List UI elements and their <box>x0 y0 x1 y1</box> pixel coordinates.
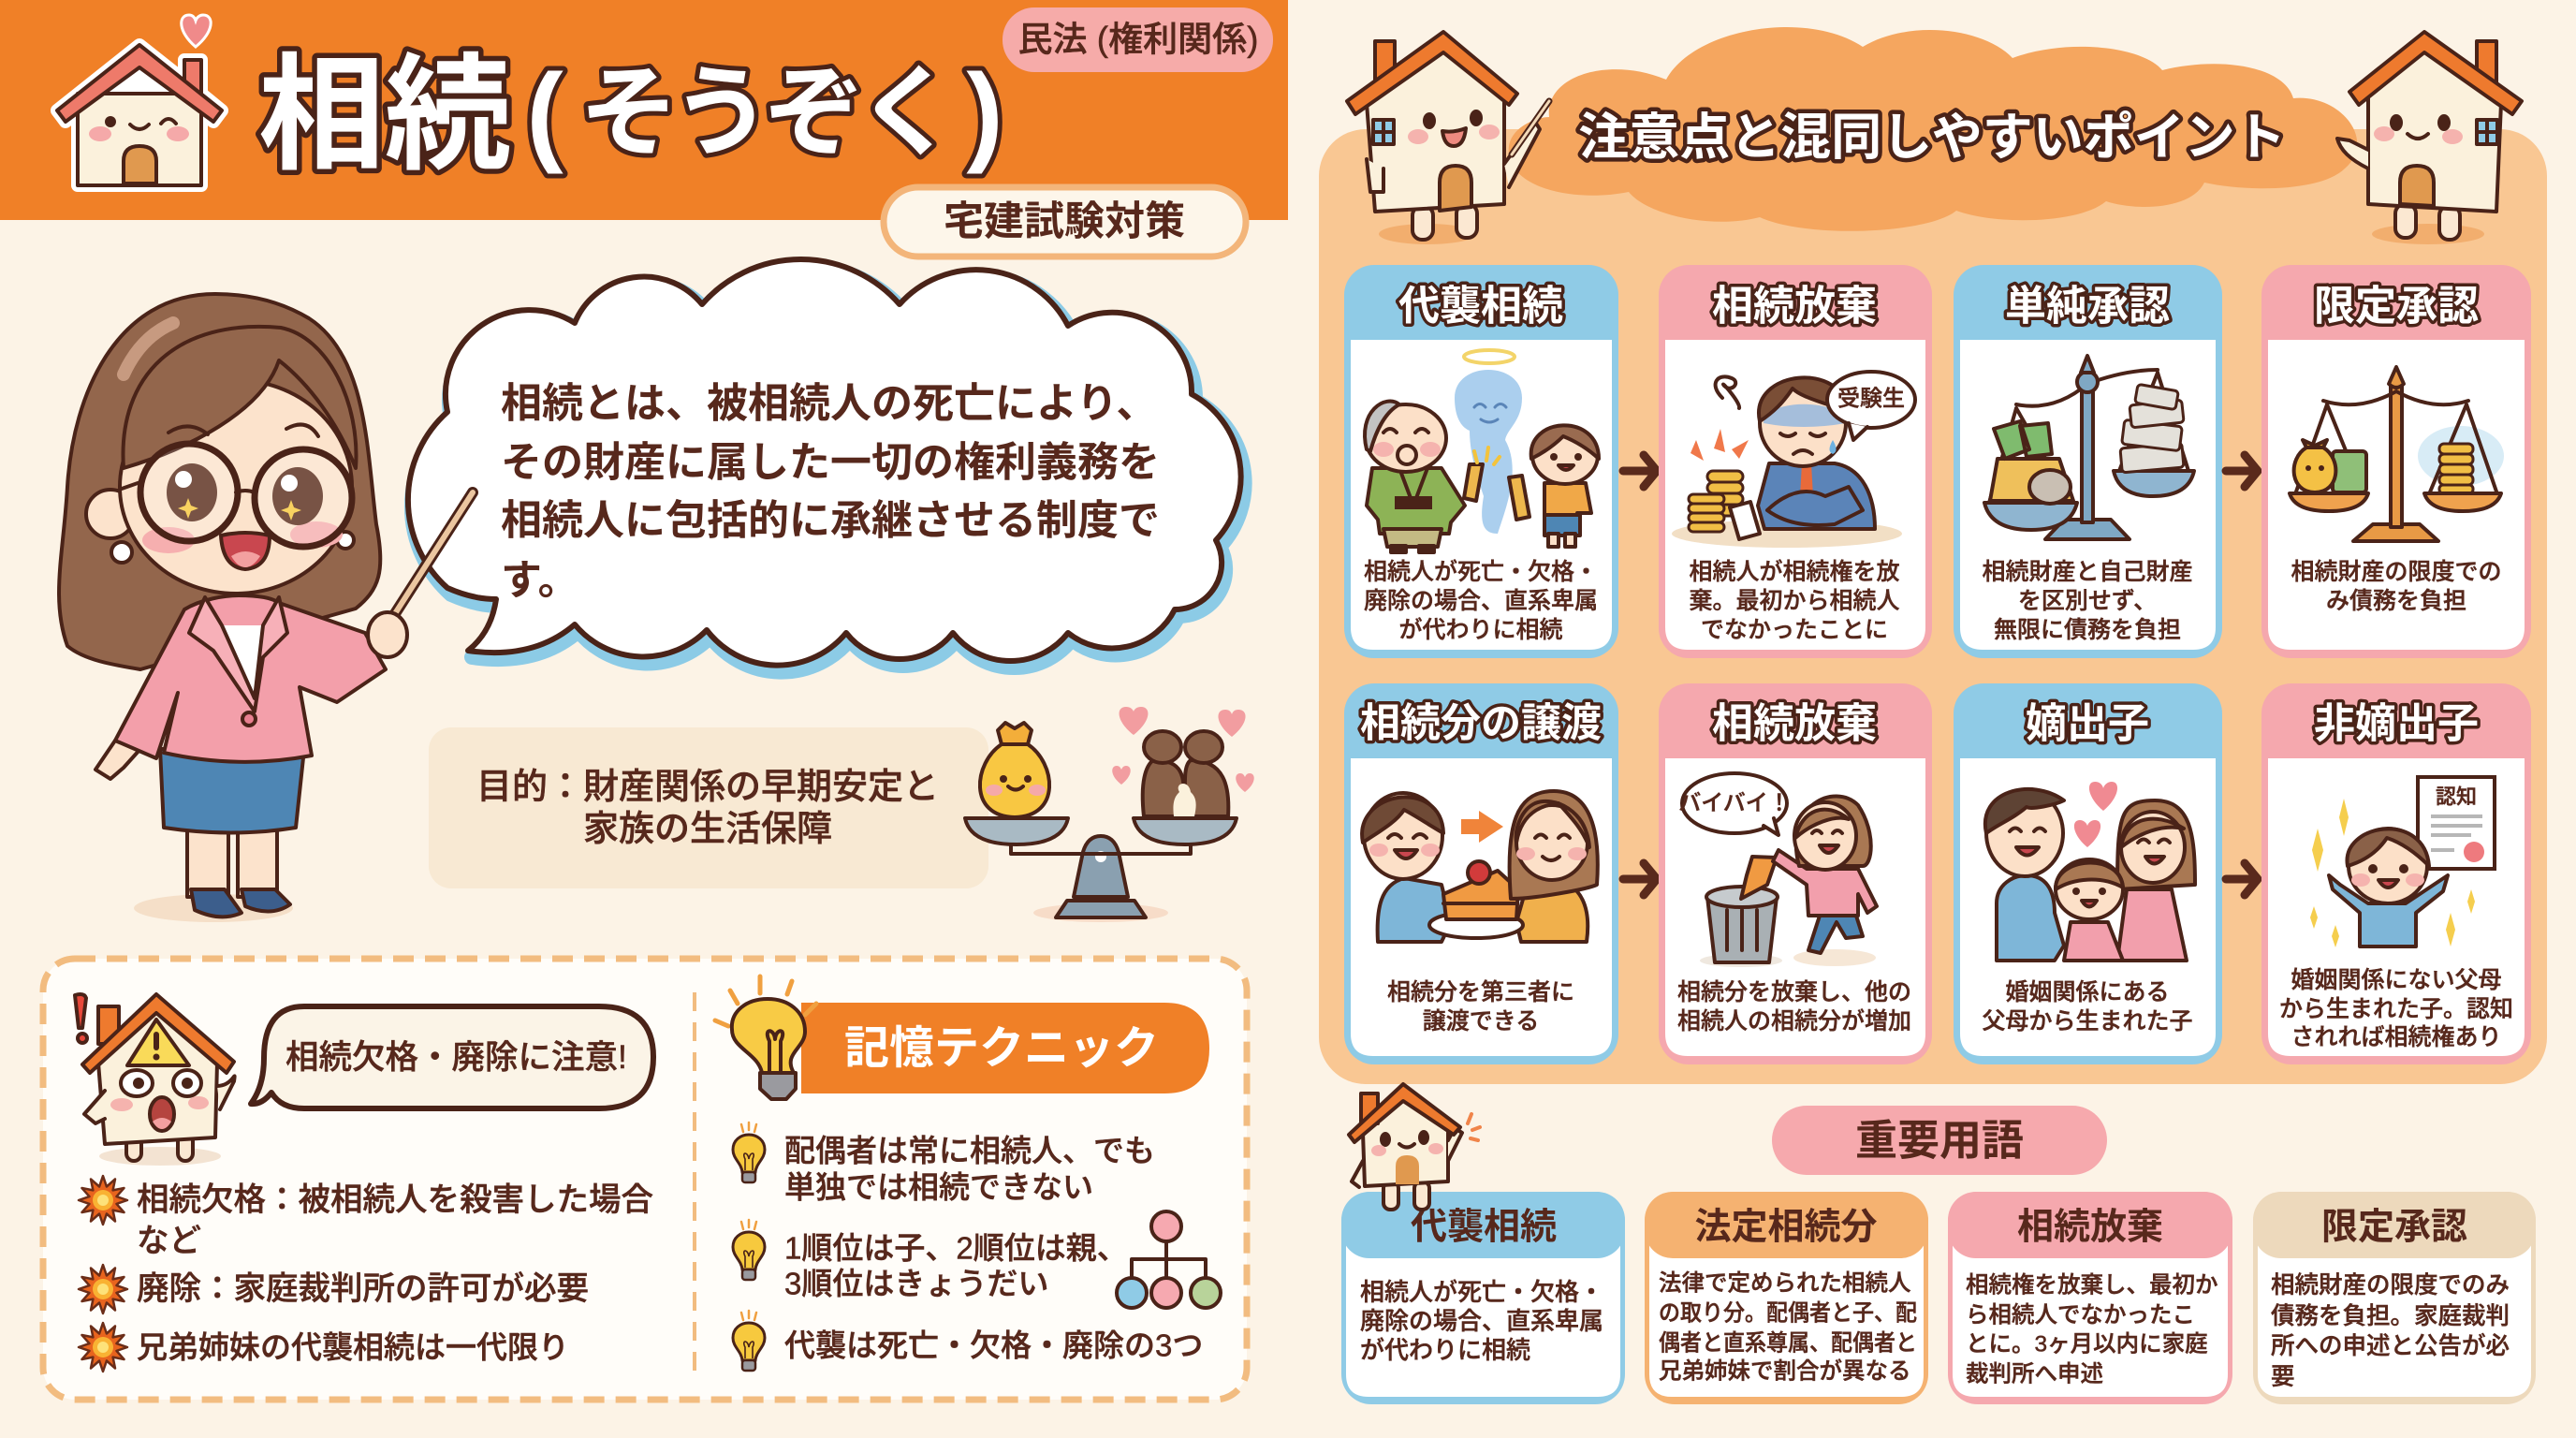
card: substitute inheritance <box>1344 265 1618 658</box>
card: legitimate child: 婚姻関係にある <box>2005 979 2170 1005</box>
tip 2 <box>733 1220 1128 1301</box>
arrow <box>1623 863 1657 895</box>
card: illegitimate child <box>2261 683 2531 1064</box>
term card: renunciation: 裁判所へ申述 <box>1966 1361 2103 1387</box>
term card: substitute inheritance: 相続人が死亡・欠格・ <box>1360 1278 1603 1306</box>
card: renouncing share: 相続分を放棄し、他の <box>1677 979 1911 1005</box>
speech bubble: warning: 相続欠格・廃除に注意! <box>285 1038 627 1076</box>
illustration: worried examinee <box>1672 372 1915 548</box>
term card: limited acceptance <box>2253 1192 2536 1404</box>
term card: limited acceptance: 債務を負担。家庭裁判 <box>2271 1303 2510 1329</box>
tag: exam prep <box>884 187 1246 257</box>
arrow <box>1623 455 1657 487</box>
warning item 3: 兄弟姉妹の代襲相続は一代限り <box>137 1329 569 1365</box>
term card: renunciation: とに。3ヶ月以内に家庭 <box>1966 1331 2208 1357</box>
card: simple acceptance <box>1954 265 2222 658</box>
warning item 1: など <box>137 1224 201 1259</box>
arrow <box>2226 863 2258 895</box>
card: simple acceptance: 無限に債務を負担 <box>1994 617 2181 643</box>
card: illegitimate child: されれば相続権あり <box>2291 1024 2502 1050</box>
card: substitute inheritance: 代襲相続 <box>1398 283 1563 330</box>
term card: limited acceptance: 要 <box>2271 1364 2295 1390</box>
illustration: unbalanced scale <box>1984 356 2194 539</box>
card: renouncing share: 相続人の相続分が増加 <box>1677 1008 1911 1034</box>
icon: small waving house <box>1349 1084 1480 1210</box>
card: renunciation: 相続人が相続権を放 <box>1689 559 1900 585</box>
illustration: balanced golden scale <box>2290 367 2504 541</box>
card: renunciation: 棄。最初から相続人 <box>1689 588 1900 614</box>
panel: points to note <box>1319 129 2547 1084</box>
term card: renunciation <box>1948 1192 2232 1404</box>
illustration: child with acknowledgement certificate <box>2296 777 2495 947</box>
warning item 3 <box>79 1323 569 1372</box>
warning item 1 <box>79 1176 653 1259</box>
card: simple acceptance: 単純承認 <box>2005 283 2170 330</box>
card: transfer of share: 相続分の譲渡 <box>1360 701 1602 746</box>
illustration: worried examinee: 受験生 <box>1837 386 1905 412</box>
tip 2: 1順位は子、2順位は親、 <box>784 1230 1128 1266</box>
card: substitute inheritance: 相続人が死亡・欠格・ <box>1364 559 1598 585</box>
term card: substitute inheritance: が代わりに相続 <box>1360 1336 1530 1364</box>
title: ( <box>526 51 564 175</box>
tag: civil law: 民法 (権利関係) <box>1018 21 1258 58</box>
term card: statutory share: の取り分。配偶者と子、配 <box>1659 1299 1917 1326</box>
tip 3 <box>733 1311 1203 1371</box>
card: limited acceptance <box>2261 265 2531 658</box>
card: legitimate child <box>1954 683 2222 1064</box>
heading cloud: 注意点と混同しやすいポイント <box>1578 110 2286 166</box>
title <box>258 45 1003 185</box>
term card: substitute inheritance <box>1341 1192 1625 1404</box>
pill: key terms <box>1772 1106 2107 1175</box>
tip 2: 3順位はきょうだい <box>784 1266 1048 1301</box>
icon: alarmed house <box>75 994 235 1166</box>
arrow <box>2226 455 2258 487</box>
purpose box: 家族の生活保障 <box>583 810 832 849</box>
purpose box <box>429 727 988 888</box>
card: simple acceptance: 相続財産と自己財産 <box>1982 559 2193 585</box>
term card: statutory share: 法定相続分 <box>1694 1208 1878 1247</box>
header band <box>0 0 1288 220</box>
speech cloud: definition <box>408 259 1245 672</box>
icon: pointer stick and hand <box>368 492 473 657</box>
icon: waving house <box>2337 32 2522 244</box>
card: limited acceptance: 相続財産の限度での <box>2291 559 2502 585</box>
tag: exam prep: 宅建試験対策 <box>944 199 1185 244</box>
tip 1: 配偶者は常に相続人、でも <box>784 1133 1155 1168</box>
illustration: child with acknowledgement certificate: 認知 <box>2436 785 2477 809</box>
title: ) <box>966 51 1003 175</box>
banner: memory technique <box>801 1003 1209 1093</box>
term card: statutory share: 兄弟姉妹で割合が異なる <box>1659 1357 1911 1384</box>
title: そうぞく <box>579 58 957 169</box>
card: renunciation: でなかったことに <box>1701 617 1888 643</box>
panel: cautions and memory tips <box>43 959 1247 1400</box>
card: legitimate child: 嫡出子 <box>2026 700 2149 747</box>
title: 相続 <box>258 45 511 185</box>
speech cloud: definition: 相続とは、被相続人の死亡により、 <box>501 380 1157 427</box>
speech bubble: warning <box>251 1006 653 1108</box>
speech cloud: definition: その財産に属した一切の権利義務を <box>501 440 1160 485</box>
speech cloud: definition: 相続人に包括的に承継させる制度で <box>501 498 1160 543</box>
heading cloud <box>1509 27 2357 231</box>
card: transfer of share <box>1344 683 1618 1064</box>
warning item 2: 廃除：家庭裁判所の許可が必要 <box>137 1271 589 1307</box>
icon: family tree <box>1117 1211 1221 1308</box>
warning item 1: 相続欠格：被相続人を殺害した場合 <box>137 1182 653 1218</box>
teacher character <box>59 294 386 922</box>
term card: renunciation: ら相続人でなかったこ <box>1966 1301 2195 1328</box>
card: illegitimate child: 非嫡出子 <box>2314 700 2479 747</box>
purpose box: 目的：財産関係の早期安定と <box>476 768 939 807</box>
card: renunciation <box>1659 265 1932 658</box>
term card: substitute inheritance: 代襲相続 <box>1411 1208 1557 1247</box>
icon: large light bulb <box>715 976 816 1099</box>
card: transfer of share: 相続分を第三者に <box>1387 979 1574 1005</box>
icon: balance with money bag and family <box>965 707 1254 922</box>
term card: limited acceptance: 相続財産の限度でのみ <box>2271 1272 2510 1299</box>
card: illegitimate child: 婚姻関係にない父母 <box>2291 967 2502 993</box>
speech cloud: definition: す。 <box>501 558 579 603</box>
card: renouncing share <box>1659 683 1932 1064</box>
term card: renunciation: 相続放棄 <box>2017 1208 2163 1247</box>
card: limited acceptance: み債務を負担 <box>2326 588 2466 614</box>
illustration: handing over a cake <box>1362 791 1598 942</box>
memory tips list <box>733 1123 1203 1371</box>
term card: renunciation: 相続権を放棄し、最初か <box>1966 1271 2218 1298</box>
card: transfer of share: 譲渡できる <box>1423 1008 1539 1034</box>
warning list <box>79 1176 653 1372</box>
card: substitute inheritance: が代わりに相続 <box>1398 617 1563 643</box>
card: substitute inheritance: 廃除の場合、直系卑属 <box>1364 588 1598 614</box>
card: legitimate child: 父母から生まれた子 <box>1982 1008 2193 1034</box>
icon: house with pointer <box>1347 32 1549 244</box>
tip 1: 単独では相続できない <box>784 1170 1093 1204</box>
term card: limited acceptance: 限定承認 <box>2321 1208 2467 1247</box>
card: renunciation: 相続放棄 <box>1712 283 1877 330</box>
term card: statutory share: 偶者と直系尊属、配偶者と <box>1659 1329 1917 1356</box>
tip 1 <box>733 1123 1155 1204</box>
warning item 2 <box>79 1265 589 1313</box>
term card: statutory share <box>1645 1192 1928 1404</box>
illustration: throwing a pie away <box>1678 773 1877 967</box>
illustration: grandfather, ghost and boy passing baton <box>1365 350 1599 552</box>
term card: limited acceptance: 所への申述と公告が必 <box>2271 1333 2510 1359</box>
card: simple acceptance: を区別せず、 <box>2018 588 2157 614</box>
tip 3: 代襲は死亡・欠格・廃除の3つ <box>784 1328 1203 1363</box>
tag: civil law <box>1003 7 1273 72</box>
pill: key terms: 重要用語 <box>1855 1116 2024 1165</box>
icon: smiling house with heart <box>57 15 222 185</box>
term card: substitute inheritance: 廃除の場合、直系卑属 <box>1360 1307 1603 1335</box>
card: limited acceptance: 限定承認 <box>2314 283 2479 330</box>
card: renouncing share: 相続放棄 <box>1712 700 1877 747</box>
illustration: throwing a pie away: バイバイ！ <box>1678 790 1791 816</box>
term card: statutory share: 法律で定められた相続人 <box>1659 1269 1911 1296</box>
banner: memory technique: 記憶テクニック <box>844 1024 1159 1073</box>
card: illegitimate child: から生まれた子。認知 <box>2279 996 2513 1022</box>
illustration: happy family <box>1985 782 2195 961</box>
